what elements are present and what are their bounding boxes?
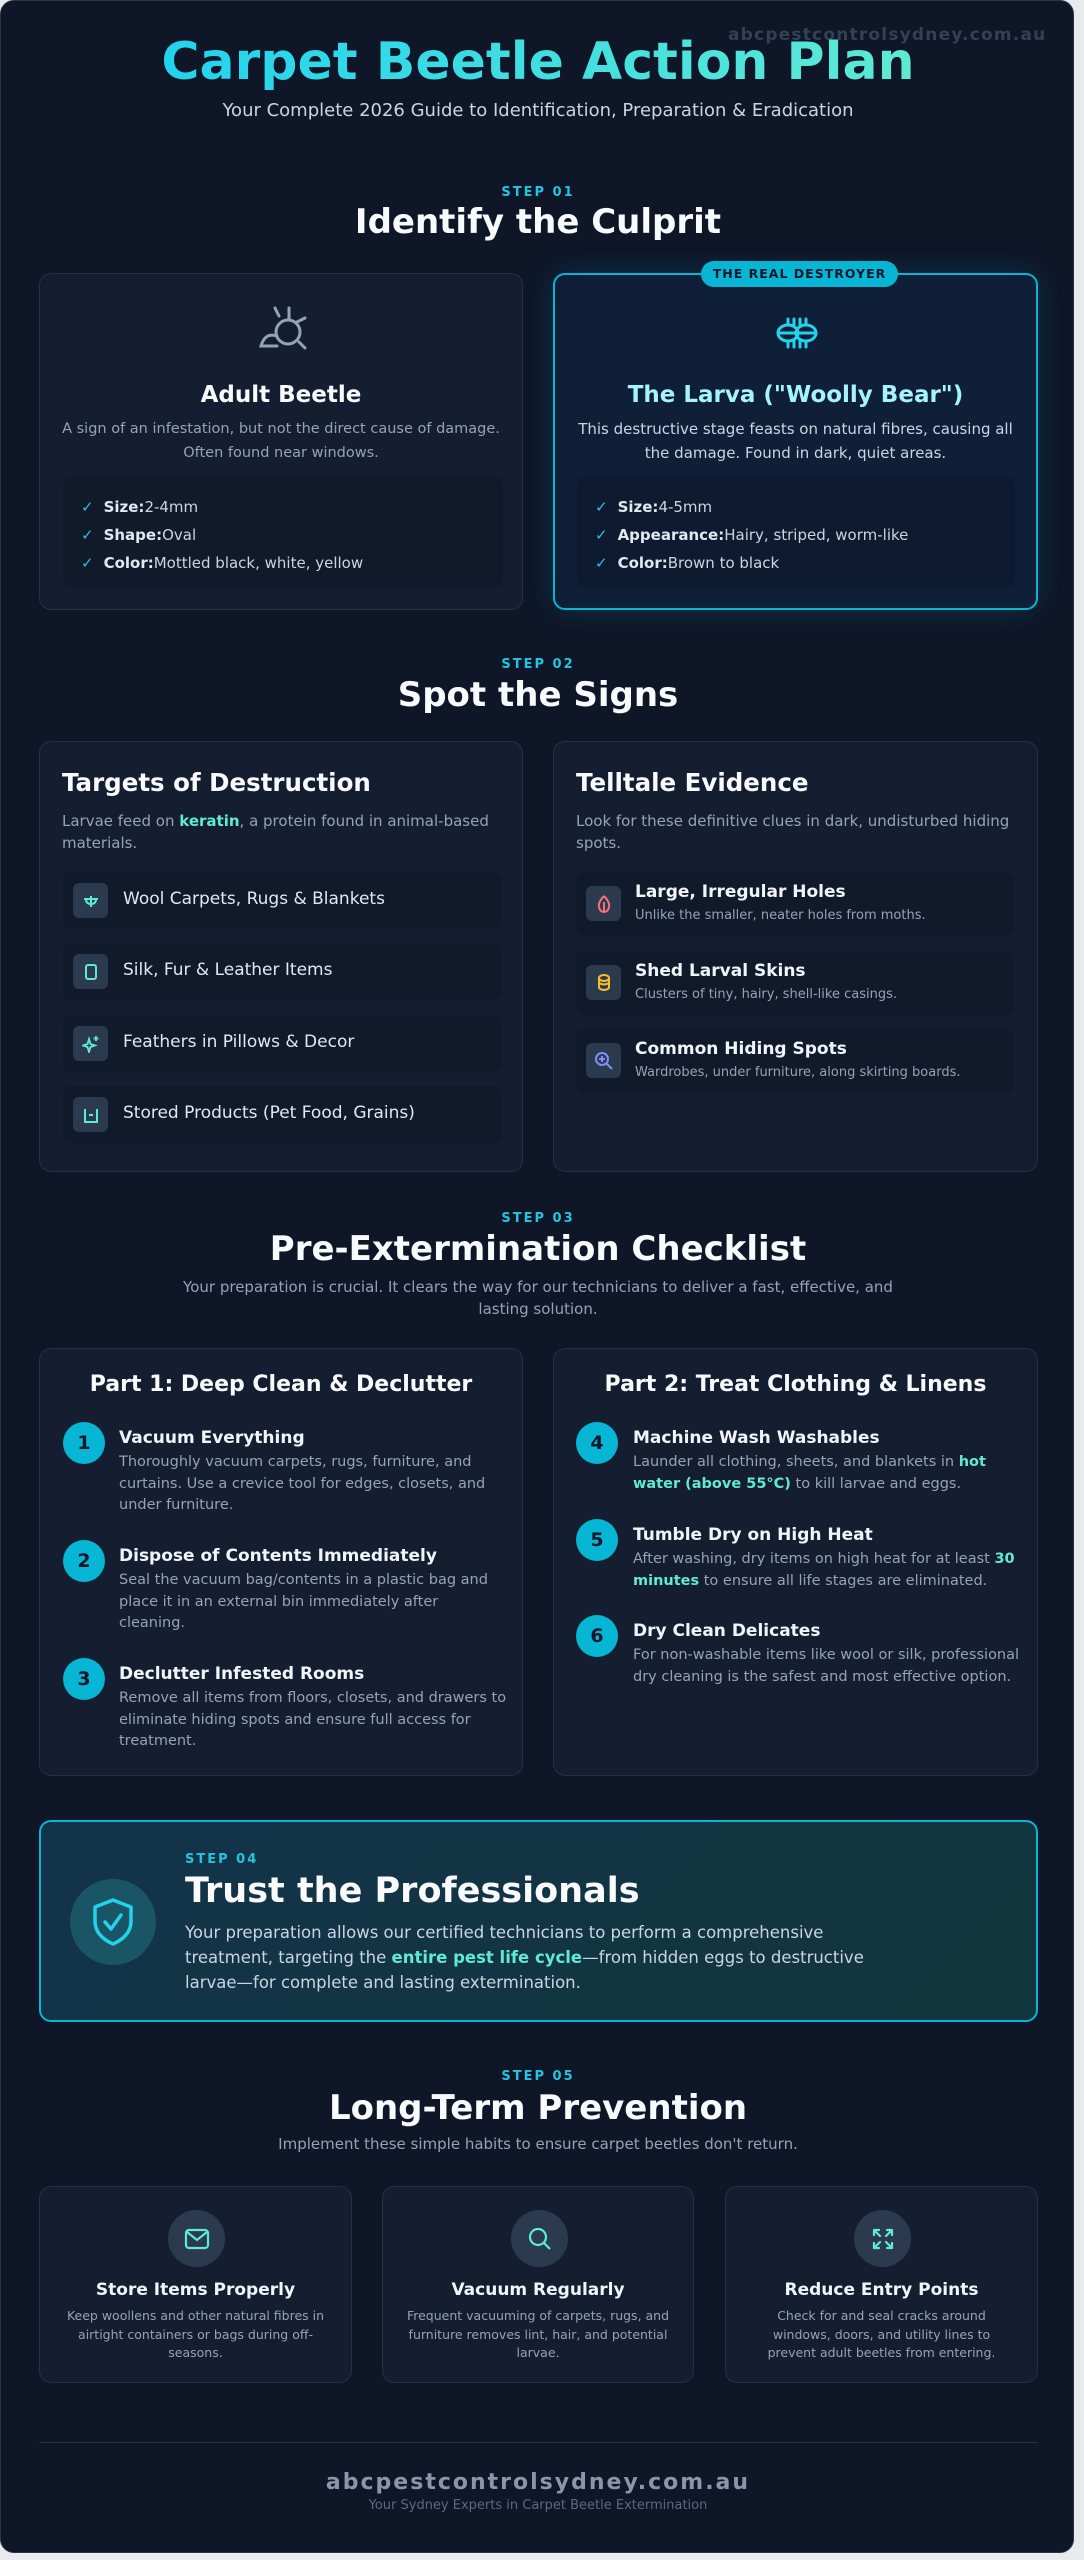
icon: envelope <box>168 2210 225 2267</box>
card: reduce entry <box>725 2186 1038 2383</box>
step 04 label: STEP 04 <box>185 1852 258 1867</box>
step 2: 2 <box>77 1550 91 1572</box>
step 1: Thoroughly vacuum carpets, rugs, furniture, and curtains. Use a crevice tool for edges, closets, and under furniture. <box>119 1454 485 1513</box>
text: prevention intro: Implement these simple habits to ensure carpet beetles don't return. <box>278 2135 798 2153</box>
panel: adult beetle <box>39 273 523 610</box>
step 01 label: STEP 01 <box>501 185 575 200</box>
icon: beetle <box>259 306 306 350</box>
step 1: Vacuum Everything <box>119 1428 305 1448</box>
list: larva facts: ✓ Color:Brown to black <box>595 554 779 572</box>
footer: abcpestcontrolsydney.com.au <box>326 2470 750 2495</box>
step 2: place it in an external bin immediately after <box>119 1594 438 1610</box>
heading: targets: Targets of Destruction <box>62 768 371 797</box>
badge <box>701 261 898 287</box>
item: stored products: Stored Products (Pet Food, Grains) <box>123 1103 415 1123</box>
step 5: 5 <box>590 1529 604 1551</box>
badge: THE REAL DESTROYER <box>713 266 886 281</box>
text: adult desc: A sign of an infestation, but not the direct cause of damage. Often found near windows. <box>62 421 500 461</box>
heading: identify: Identify the Culprit <box>355 202 721 242</box>
panel: part 1 <box>39 1348 523 1776</box>
step 02 label: STEP 02 <box>501 657 575 672</box>
text: evidence desc: Look for these definitive clues in dark, undisturbed hiding spots. <box>576 812 1009 852</box>
heading: spot the signs: Spot the Signs <box>398 675 678 715</box>
item: stored products <box>63 1086 501 1143</box>
step 3: Declutter Infested Rooms <box>119 1664 364 1684</box>
step 4: 4 <box>590 1432 604 1454</box>
step 2: Seal the vacuum bag/contents in a plastic bag and <box>119 1572 488 1588</box>
card: store items <box>39 2186 352 2383</box>
list: larva facts <box>577 477 1015 587</box>
item: silk <box>63 943 501 1000</box>
item: feathers <box>63 1015 501 1072</box>
list: adult facts: ✓ Color:Mottled black, white, yellow <box>81 554 363 572</box>
item: silk: Silk, Fur & Leather Items <box>123 960 332 980</box>
step 2: Dispose of Contents Immediately <box>119 1546 437 1566</box>
step 2: cleaning. <box>119 1615 185 1631</box>
heading: prevention: Long-Term Prevention <box>329 2088 747 2128</box>
step 6: For non-washable items like wool or silk, professional dry cleaning is the safest and most effective option. <box>633 1647 1019 1684</box>
text: larva desc: This destructive stage feasts on natural fibres, causing all the damage. Found in dark, quiet areas. <box>578 420 1013 462</box>
item: hiding spots: Wardrobes, under furniture, along skirting boards. <box>635 1065 960 1080</box>
item: feathers: Feathers in Pillows & Decor <box>123 1032 354 1052</box>
step 03 label: STEP 03 <box>501 1211 575 1226</box>
item: holes <box>576 872 1014 936</box>
card: reduce entry: Check for and seal cracks around windows, doors, and utility lines to prevent adult beetles from entering. <box>768 2308 995 2360</box>
step 5: Tumble Dry on High Heat <box>633 1525 873 1545</box>
step 5: After washing, dry items on high heat for at least 30 minutes to ensure all life stages are eliminated. <box>633 1551 1015 1588</box>
card: vacuum regularly: larvae. <box>516 2345 560 2360</box>
step 6: 6 <box>590 1625 604 1647</box>
panel: larva <box>553 273 1038 610</box>
panel: trust the professionals <box>39 1820 1038 2022</box>
step 1: 1 <box>77 1432 91 1454</box>
list: adult facts: ✓ Shape:Oval <box>81 526 196 544</box>
card: vacuum regularly: Vacuum Regularly <box>451 2280 625 2300</box>
subtitle: Your Complete 2026 Guide to Identification, Preparation & Eradication <box>222 100 854 121</box>
text: trust desc: Your preparation allows our certified technicians to perform a comprehensive treatment, targeting the entire pest life cycle—from hidden eggs to destructive larvae—for complete and lasting extermination. <box>185 1923 864 1992</box>
panel: targets <box>39 741 523 1172</box>
step 5 <box>576 1519 1015 1588</box>
item: holes: Unlike the smaller, neater holes from moths. <box>635 908 926 923</box>
footer: Your Sydney Experts in Carpet Beetle Extermination <box>369 2498 707 2513</box>
heading: trust: Trust the Professionals <box>185 1871 640 1911</box>
panel: evidence <box>553 741 1038 1172</box>
step 6: Dry Clean Delicates <box>633 1621 820 1641</box>
step 4: Machine Wash Washables <box>633 1428 880 1448</box>
list: larva facts: ✓ Appearance:Hairy, striped, worm-like <box>595 526 908 544</box>
step 4 <box>576 1422 986 1492</box>
step 4: Launder all clothing, sheets, and blankets in hot water (above 55°C) to kill larvae and eggs. <box>633 1454 986 1492</box>
heading: part 1: Part 1: Deep Clean & Declutter <box>90 1372 472 1397</box>
card: reduce entry: Reduce Entry Points <box>785 2280 978 2300</box>
step 3: 3 <box>77 1668 91 1690</box>
card: store items: Keep woollens and other natural fibres in airtight containers or bags during off-seasons. <box>67 2308 324 2360</box>
step 05 label: STEP 05 <box>501 2069 575 2084</box>
item: wool <box>63 872 501 929</box>
panel: part 2 <box>553 1348 1038 1776</box>
item: wool: Wool Carpets, Rugs & Blankets <box>123 889 385 909</box>
item: hiding spots: Common Hiding Spots <box>635 1039 847 1059</box>
heading: evidence: Telltale Evidence <box>576 768 808 797</box>
item: skins: Shed Larval Skins <box>635 961 806 981</box>
footer <box>326 2470 750 2513</box>
step 3 <box>63 1658 506 1749</box>
card: store items: Store Items Properly <box>96 2280 295 2300</box>
heading: adult beetle: Adult Beetle <box>201 382 361 408</box>
item: hiding spots <box>576 1029 1014 1093</box>
list: adult facts: ✓ Size:2-4mm <box>81 498 198 516</box>
card: vacuum regularly: furniture removes lint, hair, and potential <box>409 2326 667 2342</box>
text: checklist intro: Your preparation is crucial. It clears the way for our technicians to deliver a fast, effective, and lasting solution. <box>183 1278 893 1318</box>
icon: larva <box>776 318 818 348</box>
icon: arrows <box>854 2210 911 2267</box>
step 2 <box>63 1540 488 1631</box>
step 3: Remove all items from floors, closets, and drawers to eliminate hiding spots and ensure full access for treatment. <box>119 1690 506 1749</box>
watermark: abcpestcontrolsydney.com.au <box>728 25 1046 45</box>
heading: checklist: Pre-Extermination Checklist <box>270 1229 806 1269</box>
heading: part 2: Part 2: Treat Clothing & Linens <box>605 1372 986 1397</box>
item: skins: Clusters of tiny, hairy, shell-like casings. <box>635 987 897 1002</box>
heading: larva: The Larva ("Woolly Bear") <box>628 382 963 408</box>
title: Carpet Beetle Action Plan <box>161 32 915 92</box>
icon: shield <box>70 1879 156 1965</box>
item: skins <box>576 951 1014 1015</box>
item: holes: Large, Irregular Holes <box>635 882 846 902</box>
card: vacuum regularly: Frequent vacuuming of carpets, rugs, and <box>407 2308 669 2323</box>
text: targets desc: Larvae feed on keratin, a protein found in animal-based materials. <box>62 812 489 852</box>
icon: search <box>511 2210 568 2267</box>
list: larva facts: ✓ Size:4-5mm <box>595 498 712 516</box>
step 1 <box>63 1422 485 1513</box>
list: adult facts <box>63 477 503 587</box>
card: vacuum regularly <box>382 2186 694 2383</box>
step 6 <box>576 1615 1019 1684</box>
